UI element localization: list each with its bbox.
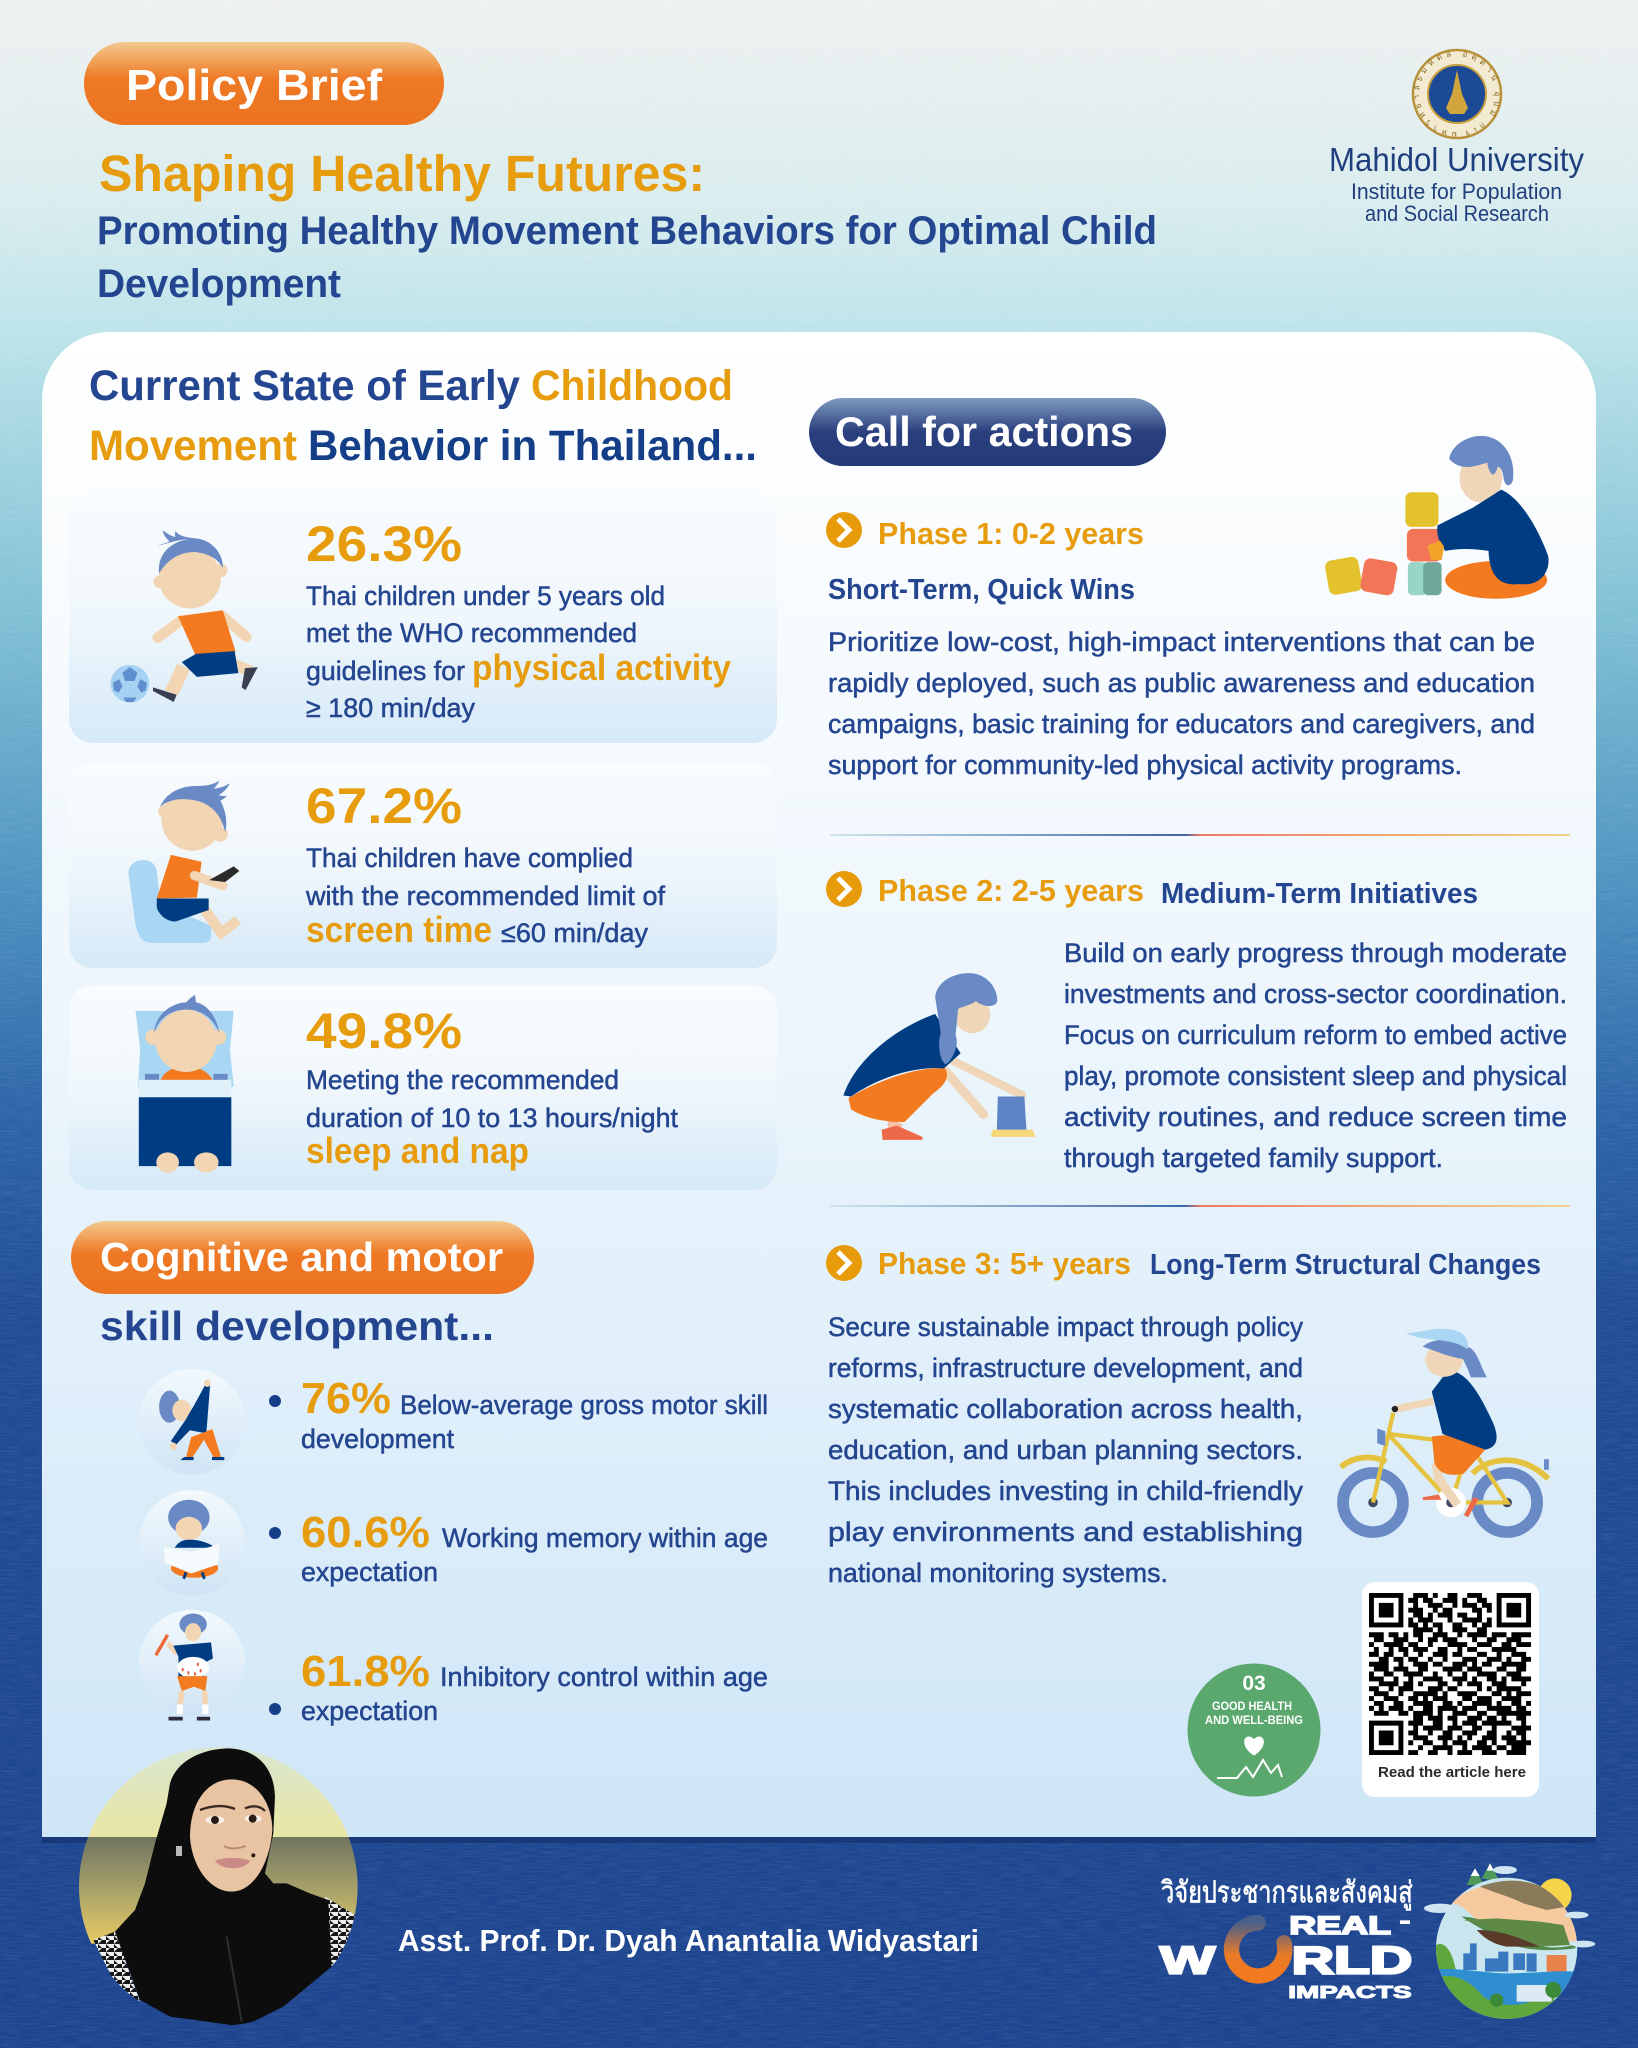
author portrait bbox=[70, 1740, 370, 2027]
phase 2: investments and cross-sector coordination. bbox=[1064, 979, 1567, 1009]
divider bbox=[830, 834, 1570, 836]
icon: boy kicking ball bbox=[111, 530, 258, 703]
Mahidol University logo: and Social Research bbox=[1365, 201, 1549, 226]
icon: boy with phone bbox=[128, 781, 239, 943]
phase 3: systematic collaboration across health, bbox=[828, 1394, 1303, 1424]
stat: working memory: 60.6% bbox=[301, 1508, 430, 1557]
card: screen time: with the recommended limit of bbox=[305, 881, 665, 911]
phase 3: This includes investing in child-friendly bbox=[828, 1476, 1304, 1506]
real-world impacts logo: IMPACTS bbox=[1288, 1982, 1412, 2002]
heading: current state: Behavior in Thailand... bbox=[308, 422, 757, 470]
heading: current state: Childhood bbox=[531, 362, 733, 410]
icon: chevron circle bbox=[826, 871, 862, 907]
Mahidol University logo bbox=[1329, 48, 1584, 226]
phase 1: Short-Term, Quick Wins bbox=[828, 574, 1135, 606]
icon: chevron circle bbox=[826, 512, 862, 548]
stat: inhibitory control: expectation bbox=[301, 1696, 438, 1726]
card: sleep: Meeting the recommended bbox=[306, 1065, 619, 1095]
phase 2: Focus on curriculum reform to embed active bbox=[1064, 1020, 1567, 1050]
card: screen time bbox=[69, 762, 777, 968]
author name: Asst. Prof. Dr. Dyah Anantalia Widyastari bbox=[398, 1923, 979, 1958]
phase 2: activity routines, and reduce screen time bbox=[1064, 1102, 1567, 1132]
badge: cognitive and motor heading: skill development... bbox=[100, 1303, 494, 1349]
heading: current state: Movement bbox=[89, 422, 297, 470]
stat: gross motor bbox=[139, 1369, 768, 1475]
stat: gross motor: development bbox=[301, 1424, 454, 1454]
stat: inhibitory control bbox=[139, 1610, 768, 1726]
card: physical activity: Thai children under 5 years old bbox=[306, 581, 665, 611]
stat: working memory: expectation bbox=[301, 1557, 438, 1587]
QR code bbox=[1369, 1595, 1531, 1753]
SDG 3 badge: AND WELL-BEING bbox=[1205, 1713, 1303, 1727]
phase 1 bbox=[826, 436, 1549, 780]
phase 2: through targeted family support. bbox=[1064, 1143, 1443, 1173]
stat: inhibitory control: Inhibitory control within age bbox=[440, 1662, 768, 1692]
card: sleep bbox=[69, 985, 777, 1190]
stat: gross motor: Below-average gross motor skill bbox=[400, 1390, 768, 1420]
badge: cognitive and motor heading: Cognitive and motor bbox=[100, 1234, 503, 1280]
badge: cognitive and motor heading bbox=[71, 1221, 534, 1349]
illustrated globe bbox=[1424, 1863, 1595, 2022]
title: Promoting Healthy Movement Behaviors for Optimal Child bbox=[97, 209, 1157, 253]
phase 1: Prioritize low-cost, high-impact interventions that can be bbox=[828, 627, 1535, 657]
card: sleep: duration of 10 to 13 hours/night bbox=[306, 1103, 678, 1133]
Mahidol University logo: Mahidol University bbox=[1329, 141, 1584, 178]
QR code card bbox=[1362, 1582, 1539, 1797]
badge: call for actions bbox=[809, 398, 1166, 466]
stat: working memory bbox=[139, 1490, 768, 1596]
stat: working memory: Working memory within age bbox=[442, 1523, 768, 1553]
real-world impacts logo: W bbox=[1160, 1938, 1216, 1982]
card: physical activity: met the WHO recommended bbox=[306, 618, 637, 648]
icon: child reading bbox=[164, 1500, 220, 1579]
policy brief badge: Policy Brief bbox=[126, 61, 382, 110]
phase 2: Phase 2: 2-5 years bbox=[878, 873, 1144, 908]
phase 3: Secure sustainable impact through policy bbox=[828, 1312, 1303, 1342]
phase 3: education, and urban planning sectors. bbox=[828, 1435, 1303, 1465]
phase 3: play environments and establishing bbox=[828, 1517, 1303, 1547]
card: physical activity: 26.3% bbox=[306, 516, 462, 572]
policy brief badge bbox=[84, 42, 444, 125]
phase 3: Long-Term Structural Changes bbox=[1150, 1249, 1541, 1281]
phase 3: national monitoring systems. bbox=[828, 1558, 1168, 1588]
main panel bbox=[42, 332, 1596, 1843]
real-world impacts logo: REAL bbox=[1289, 1912, 1391, 1940]
card: sleep: sleep and nap bbox=[306, 1130, 529, 1171]
Mahidol University logo: Institute for Population bbox=[1351, 179, 1562, 204]
phase 2 bbox=[826, 871, 1567, 1173]
icon: child stretching bbox=[159, 1379, 224, 1460]
icon: boy sleeping in bed bbox=[136, 995, 234, 1173]
phase 3 bbox=[826, 1245, 1549, 1588]
card: physical activity: ≥ 180 min/day bbox=[306, 693, 475, 723]
phase 1: rapidly deployed, such as public awareness and education bbox=[828, 668, 1535, 698]
card: sleep: 49.8% bbox=[306, 1003, 462, 1059]
card: screen time: screen time bbox=[306, 909, 492, 950]
phase 2: play, promote consistent sleep and physical bbox=[1064, 1061, 1567, 1091]
SDG 3 badge bbox=[1188, 1664, 1320, 1796]
SDG 3 badge: GOOD HEALTH bbox=[1212, 1699, 1292, 1713]
icon: chevron circle bbox=[826, 1245, 862, 1281]
phase 1: Phase 1: 0-2 years bbox=[878, 516, 1144, 551]
icon: child on bicycle bbox=[1341, 1329, 1549, 1532]
orange ring bbox=[1232, 1923, 1285, 1976]
SDG 3 badge: 03 bbox=[1242, 1672, 1266, 1695]
card: screen time: ≤60 min/day bbox=[501, 918, 648, 948]
Mahidol University logo: มหาวิทยาลัยมหิดล อตฺตานํ อุปมํ กเร bbox=[1413, 52, 1500, 136]
phase 2: Build on early progress through moderate bbox=[1064, 938, 1567, 968]
icon: child with blocks bbox=[1324, 436, 1549, 599]
QR code card: Read the article here bbox=[1378, 1764, 1526, 1781]
title bbox=[97, 145, 1157, 306]
card: screen time: Thai children have complied bbox=[306, 843, 633, 873]
card: physical activity: guidelines for bbox=[306, 656, 465, 686]
real-world impacts logo bbox=[1160, 1863, 1595, 2022]
real-world impacts logo: วิจัยประชากรและสังคมสู่ bbox=[1161, 1876, 1413, 1910]
heading: current state bbox=[89, 362, 757, 470]
badge: call for actions: Call for actions bbox=[835, 408, 1133, 455]
stat: gross motor: 76% bbox=[301, 1374, 391, 1423]
card: physical activity bbox=[69, 493, 777, 743]
icon: child painting bbox=[156, 1614, 213, 1720]
phase 3: Phase 3: 5+ years bbox=[878, 1246, 1131, 1281]
title: Shaping Healthy Futures: bbox=[99, 145, 705, 202]
card: screen time: 67.2% bbox=[306, 778, 462, 834]
stat: inhibitory control: 61.8% bbox=[301, 1647, 430, 1696]
phase 1: support for community-led physical activity programs. bbox=[828, 750, 1462, 780]
phase 3: reforms, infrastructure development, and bbox=[828, 1353, 1303, 1383]
divider bbox=[830, 1205, 1570, 1207]
phase 1: campaigns, basic training for educators and caregivers, and bbox=[828, 709, 1535, 739]
heading: current state: Current State of Early bbox=[89, 362, 520, 410]
title: Development bbox=[97, 262, 341, 306]
card: physical activity: physical activity bbox=[472, 647, 731, 688]
real-world impacts logo: RLD bbox=[1292, 1938, 1412, 1982]
icon: crouching child with cup bbox=[843, 973, 1036, 1140]
phase 2: Medium-Term Initiatives bbox=[1161, 878, 1478, 910]
